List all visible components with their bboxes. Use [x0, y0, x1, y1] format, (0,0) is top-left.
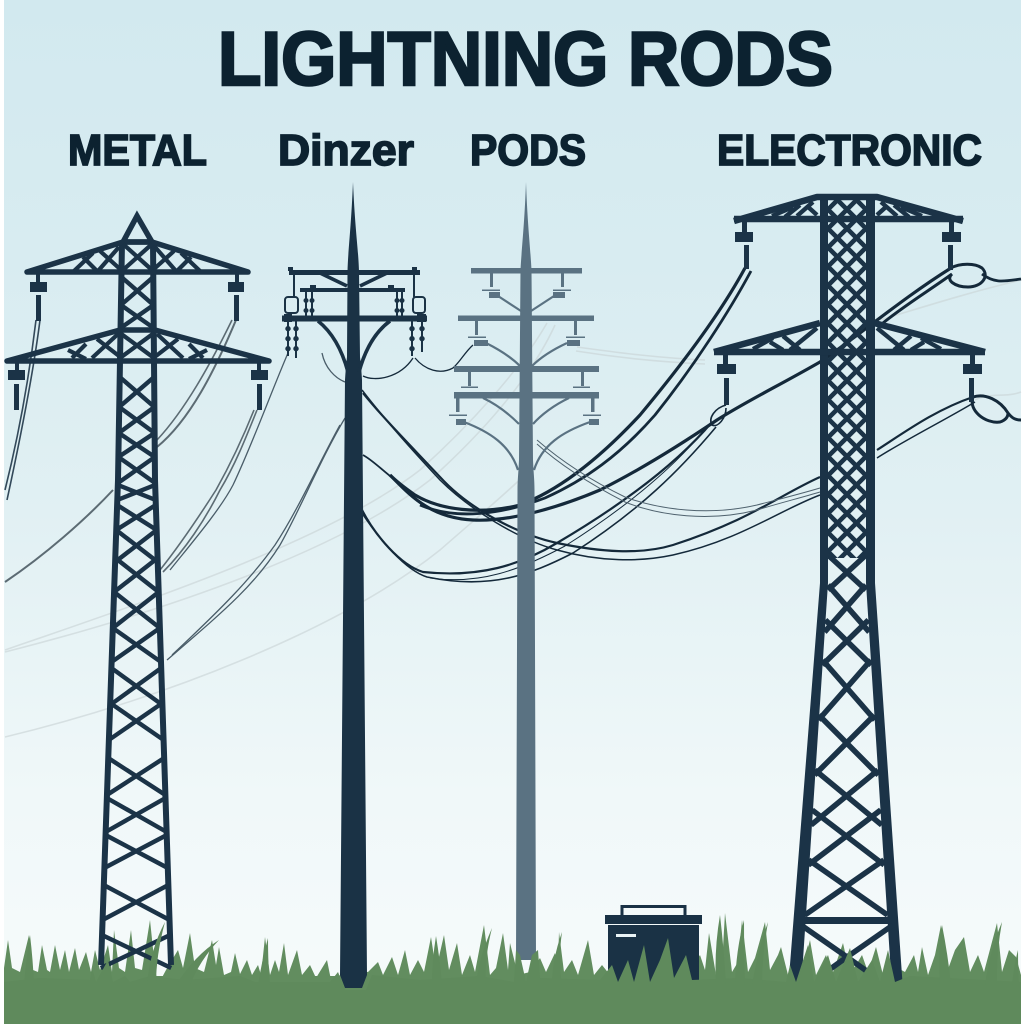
electronic tower lower arm truss	[753, 328, 941, 350]
box body	[608, 925, 699, 983]
grass: rear layer	[4, 913, 1021, 1024]
pods crossarms	[454, 268, 599, 398]
metal tower upper arm	[27, 242, 248, 272]
icon: battery box	[605, 906, 702, 983]
label: electronic: ELECTRONIC	[717, 126, 982, 175]
grass fill band	[4, 976, 1021, 1024]
slender grass blades	[24, 915, 1019, 985]
metal tower legs	[101, 242, 171, 965]
dinzer pole shaft	[340, 182, 367, 988]
metal tower lower arm truss	[68, 333, 207, 359]
pole: pods	[449, 182, 601, 960]
pole: dinzer	[282, 182, 427, 988]
metal tower insulators	[8, 272, 268, 410]
box handle	[622, 906, 685, 915]
wires: thin grey double span	[537, 440, 820, 516]
metal tower lattice	[101, 277, 171, 968]
tower: electronic	[714, 197, 985, 990]
dinzer braces	[318, 273, 390, 372]
dinzer crossarms	[282, 270, 427, 322]
faint background wires	[5, 280, 1021, 737]
electronic tower lower lattice	[801, 555, 893, 972]
dinzer insulators	[284, 267, 426, 358]
pods insulators	[449, 273, 601, 425]
label: pods: PODS	[470, 126, 586, 175]
electronic tower upper arm truss	[772, 202, 922, 217]
label: metal: METAL	[68, 126, 207, 175]
metal tower lower arm	[7, 330, 269, 361]
electronic tower upper arm	[734, 197, 963, 221]
electronic tower legs	[788, 198, 903, 990]
pods pole shaft	[516, 182, 536, 960]
label: dinzer: Dinzer	[278, 126, 414, 175]
pods braces	[464, 296, 590, 470]
grass: front layer	[4, 915, 1021, 1024]
box lid	[605, 915, 702, 924]
wires: main spans between poles	[322, 264, 1021, 582]
box label mark	[616, 934, 636, 937]
electronic tower lattice	[826, 200, 868, 558]
electronic tower lower arm	[714, 323, 985, 352]
front grass base	[4, 938, 1021, 1024]
grass zigzag	[4, 913, 1021, 1024]
metal tower upper arm truss	[74, 244, 200, 271]
electronic tower insulators	[717, 221, 982, 405]
wires: grey spans behind tower one	[5, 320, 345, 660]
tower: metal	[7, 216, 269, 968]
metal tower peak	[123, 216, 152, 242]
electronic tower cross bar	[803, 917, 890, 924]
title: LIGHTNING RODS	[218, 17, 833, 102]
